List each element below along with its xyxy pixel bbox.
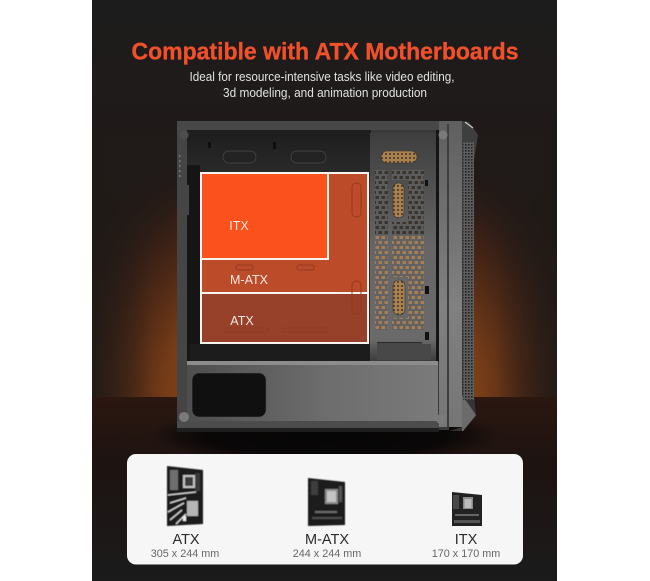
tray details under overlay bbox=[224, 183, 361, 332]
front mesh bbox=[463, 142, 474, 400]
M-ATX label bbox=[293, 532, 361, 560]
dark background panel bbox=[92, 0, 557, 581]
PSU shroud bbox=[187, 362, 438, 421]
PC case bbox=[177, 121, 478, 432]
subtitle: 3d modeling, and animation production bbox=[223, 86, 427, 100]
ITX label: 170 x 170 mm bbox=[432, 548, 500, 560]
thumb screws bbox=[179, 130, 448, 424]
M-ATX label: 244 x 244 mm bbox=[293, 548, 361, 560]
lower cable strip bbox=[190, 344, 370, 362]
case frame bbox=[177, 121, 449, 430]
drive cage panel bbox=[370, 133, 436, 362]
left rail bbox=[177, 130, 187, 422]
ATX label: 305 x 244 mm bbox=[151, 548, 219, 560]
left rail vents bbox=[179, 155, 180, 177]
label ITX: ITX bbox=[229, 219, 249, 233]
ITX label bbox=[432, 532, 500, 560]
ATX label: ATX bbox=[172, 532, 200, 548]
ITX board icon bbox=[452, 492, 482, 526]
ATX board icon bbox=[167, 466, 203, 526]
M-ATX board icon bbox=[308, 478, 345, 526]
size panel bbox=[127, 454, 523, 564]
tie points bbox=[208, 142, 276, 149]
front corner highlight bbox=[465, 122, 473, 128]
rear slot highlight bbox=[188, 185, 189, 215]
cable cutouts bbox=[223, 151, 326, 163]
label M-ATX: M-ATX bbox=[230, 273, 269, 287]
ATX outline bbox=[201, 173, 368, 343]
ATX label bbox=[151, 532, 219, 560]
subtitle: Ideal for resource-intensive tasks like video editing, bbox=[190, 70, 454, 84]
title: Compatible with ATX Motherboards bbox=[132, 38, 518, 66]
motherboard tray bbox=[187, 130, 371, 362]
front panel bbox=[450, 121, 478, 431]
M-ATX divider bbox=[200, 292, 369, 294]
ITX label: ITX bbox=[455, 532, 478, 548]
PSU opening bbox=[192, 373, 266, 417]
bottom front wedge bbox=[462, 395, 476, 431]
top rail bbox=[177, 121, 447, 130]
bottom rail bbox=[177, 421, 439, 432]
M-ATX label: M-ATX bbox=[305, 532, 349, 548]
label ATX: ATX bbox=[230, 314, 254, 328]
right pillar bbox=[439, 121, 462, 427]
rear slot shadow bbox=[187, 165, 200, 362]
ITX box bbox=[201, 173, 328, 259]
subtitle bbox=[190, 70, 454, 100]
perforations bbox=[375, 151, 431, 360]
